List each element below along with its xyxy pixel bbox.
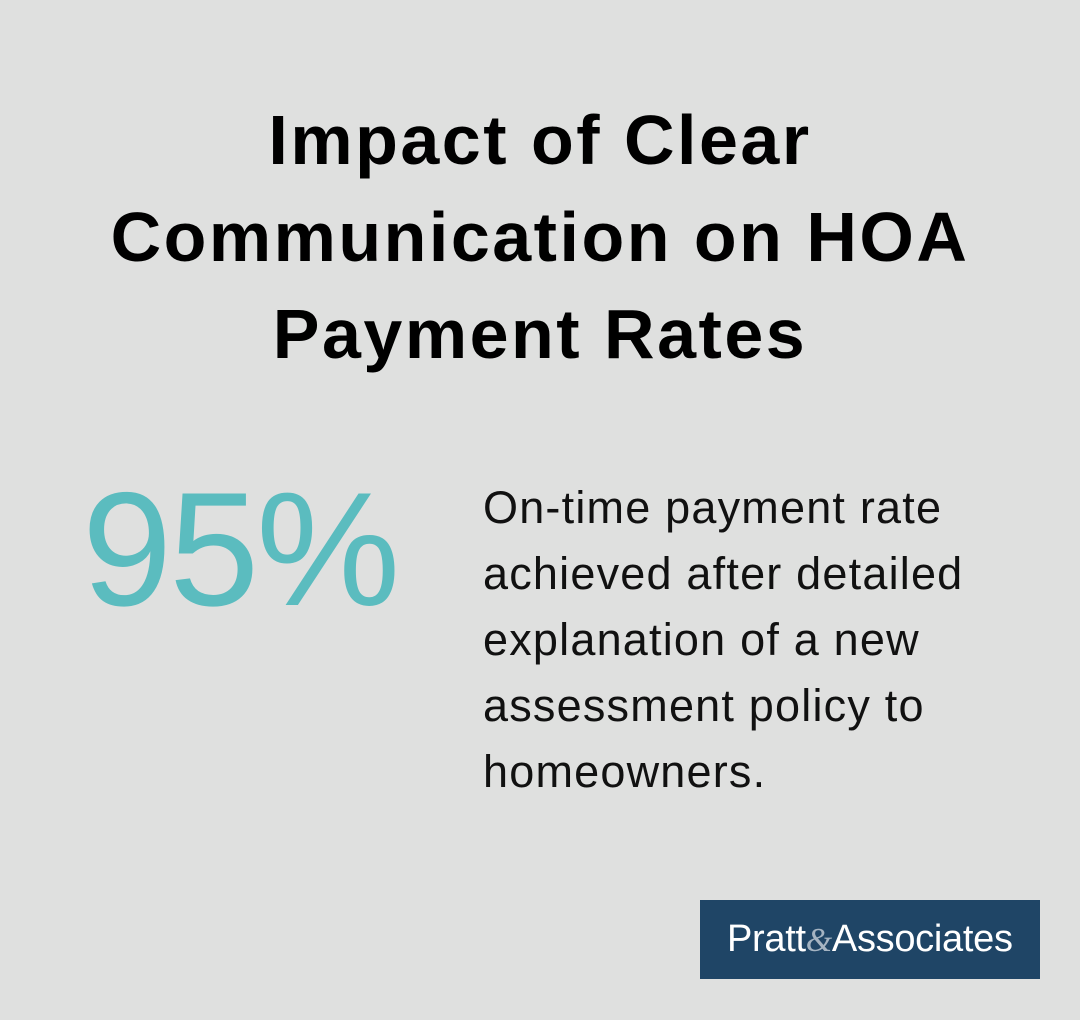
description text: assessment policy to bbox=[483, 680, 925, 731]
description text: explanation of a new bbox=[483, 614, 920, 665]
title: Payment Rates bbox=[273, 295, 807, 373]
description text: achieved after detailed bbox=[483, 548, 963, 599]
logo: Pratt & Associates: Pratt&Associates bbox=[727, 918, 1013, 960]
title bbox=[111, 101, 969, 373]
stat: 95%: 95% bbox=[82, 459, 397, 640]
logo: Pratt & Associates bbox=[700, 900, 1040, 979]
description text bbox=[483, 482, 963, 797]
title: Communication on HOA bbox=[111, 198, 969, 276]
description text: homeowners. bbox=[483, 746, 766, 797]
description text: On-time payment rate bbox=[483, 482, 942, 533]
title: Impact of Clear bbox=[268, 101, 812, 179]
